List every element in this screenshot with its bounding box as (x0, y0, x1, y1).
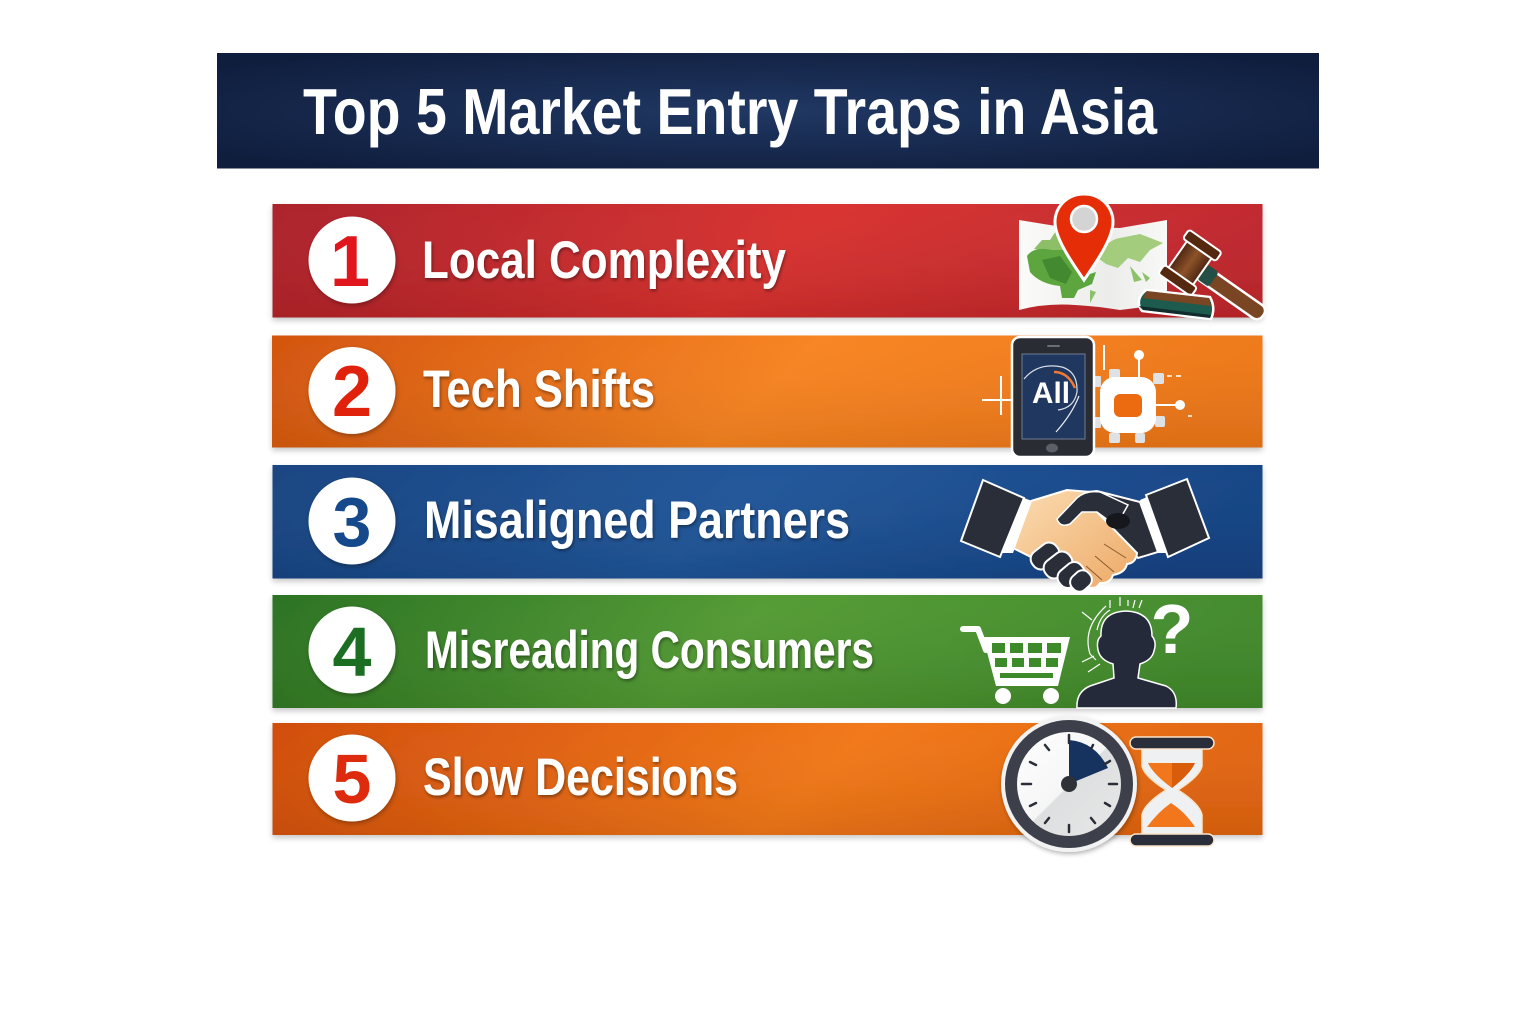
row 4 bar (272, 595, 1262, 708)
row 2 label: Tech Shifts (423, 360, 655, 419)
row 2: tech shifts (272, 336, 1262, 457)
row 1 number badge (308, 216, 396, 304)
row 1 label: Local Complexity (422, 231, 786, 290)
row 3 bar (272, 465, 1262, 578)
row 5 number badge (308, 734, 396, 822)
row 5: slow decisions (272, 716, 1262, 852)
row 5 label: Slow Decisions (423, 748, 738, 807)
row 5 bar (272, 723, 1262, 835)
row 3 label: Misaligned Partners (424, 491, 850, 550)
title text: Top 5 Market Entry Traps in Asia (303, 75, 1158, 148)
row 2 bar (272, 336, 1262, 448)
row 4 number badge: 4 (333, 613, 372, 691)
icon: clock (1001, 716, 1137, 852)
row 2 number badge: 2 (332, 352, 372, 432)
icon: shopping cart (963, 629, 1070, 704)
icon: circuit chip (982, 345, 1192, 443)
row 2 number badge (308, 347, 396, 434)
row 4: misreading consumers (272, 590, 1262, 708)
row 1 bar (272, 204, 1262, 318)
icon: map with location pin (1019, 194, 1167, 310)
title banner (217, 53, 1319, 168)
icon: hourglass (1130, 737, 1214, 846)
icon: AI tablet: All (1032, 377, 1070, 410)
row 3: misaligned partners (272, 465, 1262, 595)
row 1 number badge: 1 (330, 222, 370, 302)
row 3 number badge (308, 478, 396, 564)
icon: handshake (961, 479, 1209, 595)
row 3 number badge: 3 (333, 483, 371, 561)
row 5 number badge: 5 (333, 740, 371, 818)
icon: confused consumer silhouette: ? (1151, 590, 1193, 668)
icon: confused consumer silhouette (1077, 590, 1193, 708)
row 1: local complexity (272, 194, 1279, 337)
row 4 label: Misreading Consumers (425, 621, 874, 680)
icon: gavel (1139, 229, 1279, 337)
row 4 number badge (308, 606, 396, 694)
icon: AI tablet (1012, 337, 1094, 457)
